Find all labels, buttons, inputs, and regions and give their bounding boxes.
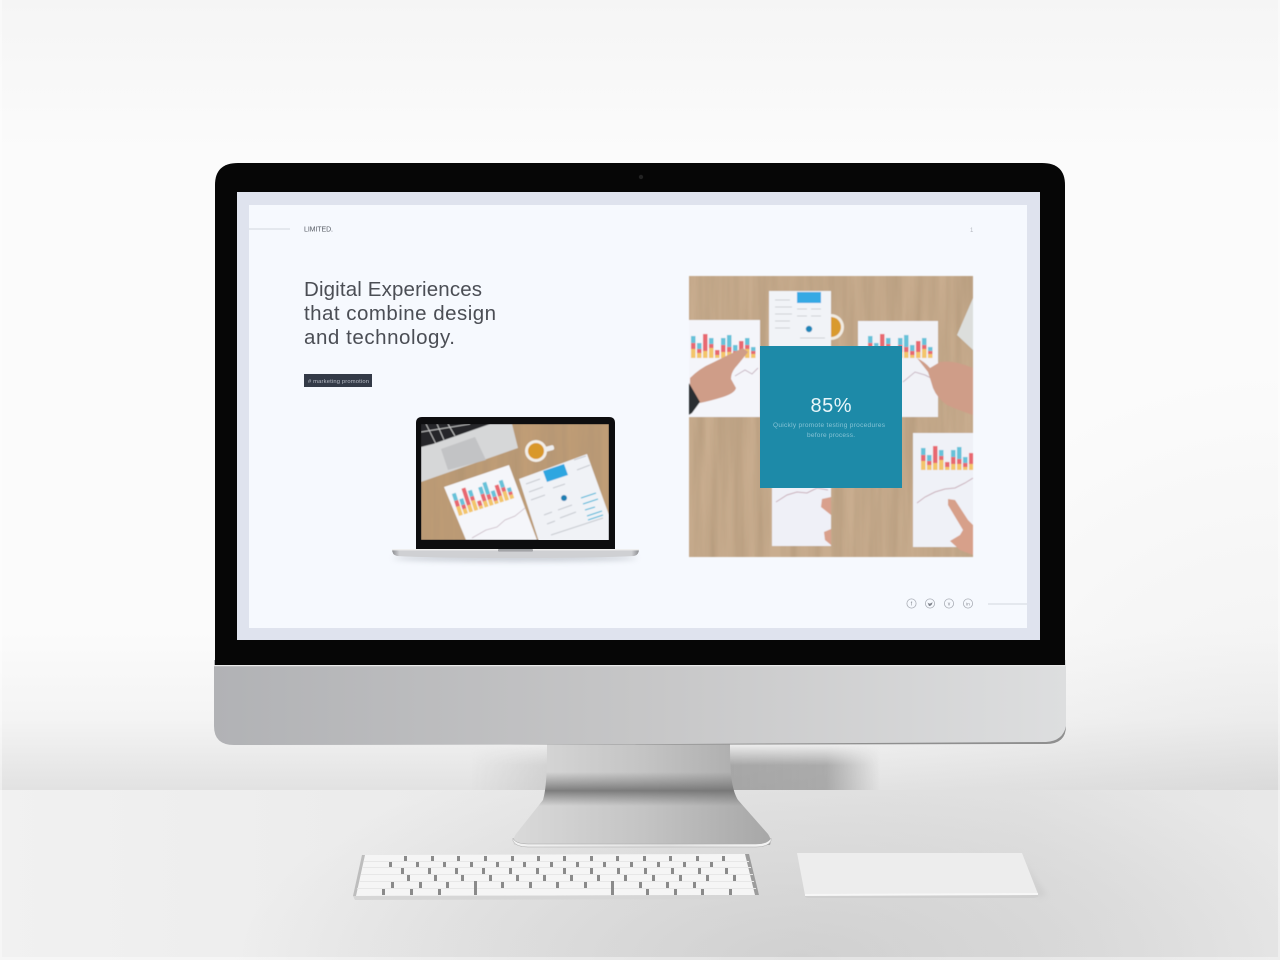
stat description xyxy=(773,422,886,439)
keyboard xyxy=(353,854,759,900)
headline: that combine design xyxy=(304,302,496,325)
social icons xyxy=(907,599,973,608)
slide outer frame xyxy=(237,192,1040,640)
desk surface xyxy=(0,790,1280,960)
icon: vimeo: v xyxy=(948,602,951,608)
slide header xyxy=(249,226,333,234)
top left photo tile xyxy=(689,291,839,417)
icon: pointing hand xyxy=(690,348,748,403)
monitor shadow on wall xyxy=(498,748,874,790)
laptop mockup xyxy=(392,417,639,562)
hashtag tag xyxy=(304,374,372,387)
wood background xyxy=(689,276,973,557)
icon: linkedin: in xyxy=(966,602,970,606)
icon: facebook: f xyxy=(911,602,913,608)
headline: and technology. xyxy=(304,326,455,349)
bottom left photo tile xyxy=(771,488,832,547)
stat description: before process. xyxy=(807,432,855,439)
headline: Digital Experiences xyxy=(304,278,482,301)
slide inner page xyxy=(249,205,1027,628)
webcam xyxy=(639,175,643,179)
monitor chin xyxy=(214,660,1066,745)
monitor xyxy=(214,163,1066,745)
laptop body xyxy=(416,417,615,549)
icon: twitter xyxy=(925,599,935,608)
teal stat card xyxy=(760,346,902,488)
top right photo tile xyxy=(818,298,973,417)
stat description: Quickly promote testing procedures xyxy=(773,422,886,429)
headline xyxy=(304,278,496,349)
icon: pointing hand xyxy=(917,358,973,415)
trackpad xyxy=(797,853,1046,898)
laptop base xyxy=(392,549,639,558)
brand label: LIMITED. xyxy=(304,226,333,234)
page number: 1 xyxy=(970,228,974,234)
stat value: 85% xyxy=(810,395,852,417)
laptop screen photo xyxy=(421,424,609,545)
monitor black bezel xyxy=(215,163,1065,665)
bottom right photo tile xyxy=(912,432,974,555)
monitor stand xyxy=(510,744,775,847)
hashtag tag: # marketing promotion xyxy=(308,379,369,385)
photo collage xyxy=(689,276,986,557)
